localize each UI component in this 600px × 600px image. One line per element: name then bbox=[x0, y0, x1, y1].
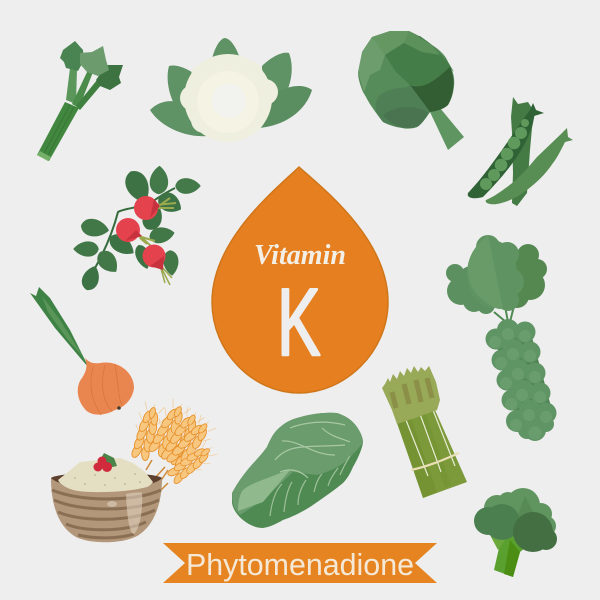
heading: K: K bbox=[277, 270, 321, 376]
icon: artichoke bbox=[358, 31, 464, 150]
icon: wheat bbox=[126, 398, 219, 490]
banner: Phytomenadione: Phytomenadione bbox=[186, 547, 414, 582]
heading: Vitamin: Vitamin bbox=[254, 239, 346, 271]
panel: vitamin drop bbox=[212, 167, 388, 393]
icon: rosehip branch bbox=[73, 165, 201, 293]
icon: broccoli bbox=[474, 488, 557, 577]
icon: onion bbox=[30, 287, 134, 415]
icon: napa cabbage bbox=[232, 413, 363, 528]
icon: brussels sprouts stalk bbox=[446, 235, 556, 441]
icon: peas bbox=[468, 97, 573, 206]
icon: celery bbox=[37, 41, 123, 161]
icon: porridge bowl bbox=[51, 453, 162, 542]
drop shape bbox=[212, 167, 388, 393]
icon: cauliflower bbox=[150, 38, 312, 142]
icon: asparagus bunch bbox=[382, 366, 467, 498]
